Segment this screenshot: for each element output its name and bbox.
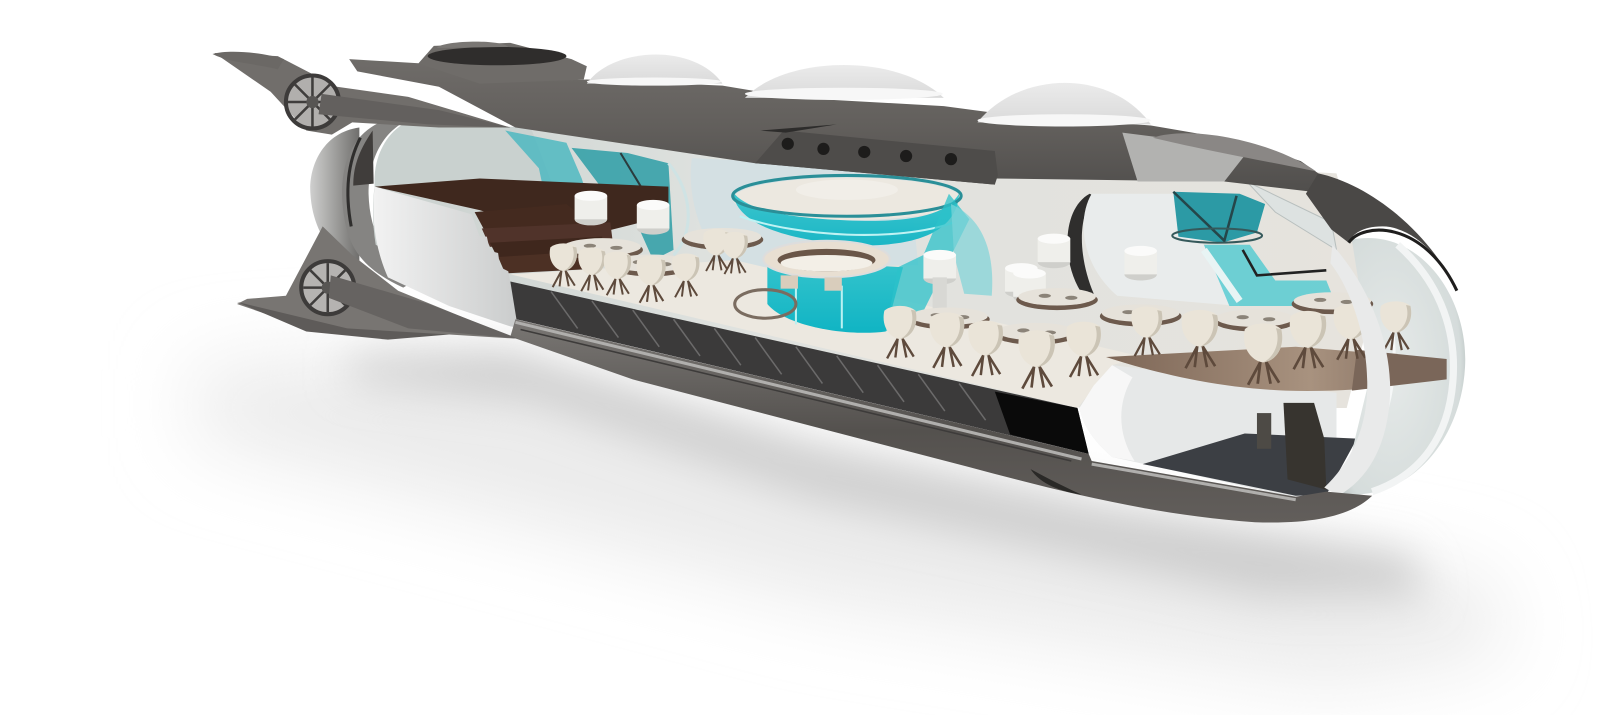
glass domes — [587, 55, 1151, 126]
wood platform over glass — [1352, 350, 1447, 391]
wood platform — [1106, 347, 1447, 391]
lower rear fin and propeller — [237, 226, 518, 340]
upper deck — [349, 59, 1329, 194]
rear upper glass room — [374, 122, 551, 187]
rear bulb — [310, 127, 359, 267]
upper rear fin and propeller — [212, 52, 510, 135]
forward cyan stair — [1172, 192, 1337, 306]
cyan rear staircase — [505, 131, 688, 260]
nose glass dome — [1342, 238, 1465, 495]
lower hull — [510, 319, 1372, 523]
port holes bracket — [755, 124, 998, 185]
central bar cylinder — [735, 194, 969, 333]
forward structural panel — [1247, 182, 1337, 250]
cockpit lower room — [1079, 365, 1357, 498]
round bulkhead doorway — [691, 158, 918, 267]
cyan spiral mid — [951, 204, 992, 296]
main floor — [510, 260, 1143, 408]
top conning tower — [419, 42, 587, 87]
lamps rear — [575, 191, 669, 235]
white nose rib — [1324, 245, 1390, 496]
dining chairs — [550, 229, 1411, 389]
stairs — [475, 204, 612, 273]
dining tables — [561, 228, 1373, 345]
upper cyan ring — [733, 175, 961, 245]
rear rings — [342, 122, 413, 288]
interior back wall — [373, 122, 1372, 408]
ground shadow — [194, 352, 1510, 683]
right round bulkhead — [1067, 194, 1240, 306]
black lower panels — [510, 282, 1089, 454]
rear white bulkhead — [373, 187, 523, 328]
hanging lamps centre — [923, 234, 1157, 311]
nose outer shell — [1306, 173, 1457, 291]
wooden upper deck — [375, 178, 668, 240]
